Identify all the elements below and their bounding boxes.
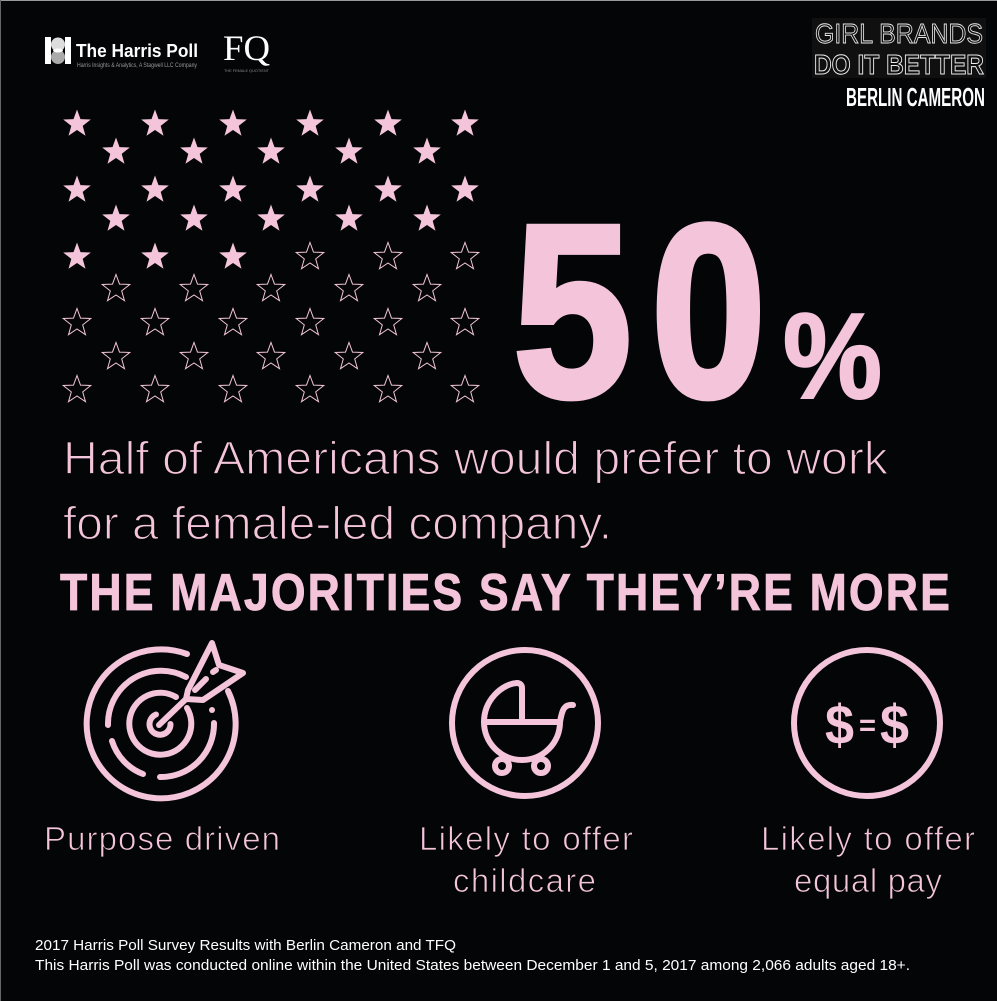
headline text: for a female-led company.: [63, 497, 612, 549]
footnote: This Harris Poll was conducted online within the United States between December 1 and 5, 2017 among 2,066 adults aged 18+.: [35, 957, 910, 974]
label: likely to offer equal pay: Likely to offer: [761, 820, 975, 857]
label: purpose driven: Purpose driven: [44, 820, 280, 857]
big number: 50%: [513, 174, 882, 449]
icon: baby stroller: [452, 650, 598, 796]
label: likely to offer childcare: childcare: [453, 862, 596, 899]
headline text: [63, 432, 889, 549]
big number: 50%: 0: [651, 174, 766, 449]
footnote: 2017 Harris Poll Survey Results with Berlin Cameron and TFQ: [35, 937, 456, 954]
logo: Girl Brands Do It Better, Berlin Cameron: [812, 18, 986, 112]
big number: 50%: 5: [513, 174, 632, 449]
label: likely to offer equal pay: equal pay: [794, 862, 942, 899]
logo: The Harris Poll: Harris Insights & Analytics, A Stagwell LLC Company: [77, 63, 197, 69]
headline text: Half of Americans would prefer to work: [63, 432, 889, 484]
logo: TFQ: THE FEMALE QUOTIENT: [224, 69, 270, 73]
label: likely to offer equal pay: [761, 820, 975, 899]
logo: The Harris Poll: The Harris Poll: [76, 41, 198, 61]
icon: dollar equals dollar: $: [825, 693, 854, 756]
logo: The Harris Poll: [45, 37, 198, 69]
logo: TFQ: FQ: [223, 28, 270, 68]
footnote: [35, 937, 910, 974]
label: likely to offer childcare: Likely to offer: [419, 820, 633, 857]
big number: 50%: %: [783, 288, 882, 424]
icon: dollar equals dollar: $: [880, 693, 909, 756]
icon: dollar equals dollar: =: [859, 709, 876, 742]
star chart: half of 50 stars filled: [63, 110, 479, 402]
icon: dollar equals dollar: [794, 650, 940, 796]
label: likely to offer childcare: [419, 820, 633, 899]
icon: target with arrow: [87, 643, 243, 798]
